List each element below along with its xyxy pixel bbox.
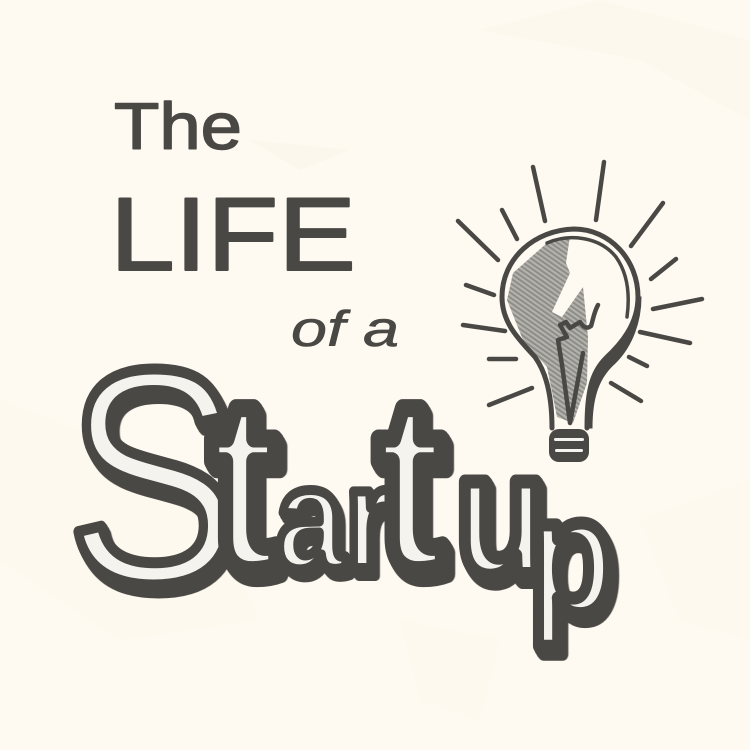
bulb screw base [549,429,589,462]
bulb shading [507,236,588,423]
bulb glass outline [502,229,638,428]
bulb inner highlight [547,238,628,317]
title: Startup: p [529,463,614,648]
title: Startup: t [209,347,278,621]
title: Startup: t [376,347,445,621]
icon: light bulb [458,162,702,462]
title: Startup: S [66,306,239,647]
bulb thick right edge [587,297,641,428]
title: of a: of a [291,301,399,357]
rays [458,162,702,405]
title: The: The [114,89,242,163]
filament [558,305,598,423]
title: Startup: r [345,437,393,599]
title: LIFE: LIFE [110,177,356,293]
title: Startup: a [276,437,346,599]
title: Startup: u [456,417,546,612]
